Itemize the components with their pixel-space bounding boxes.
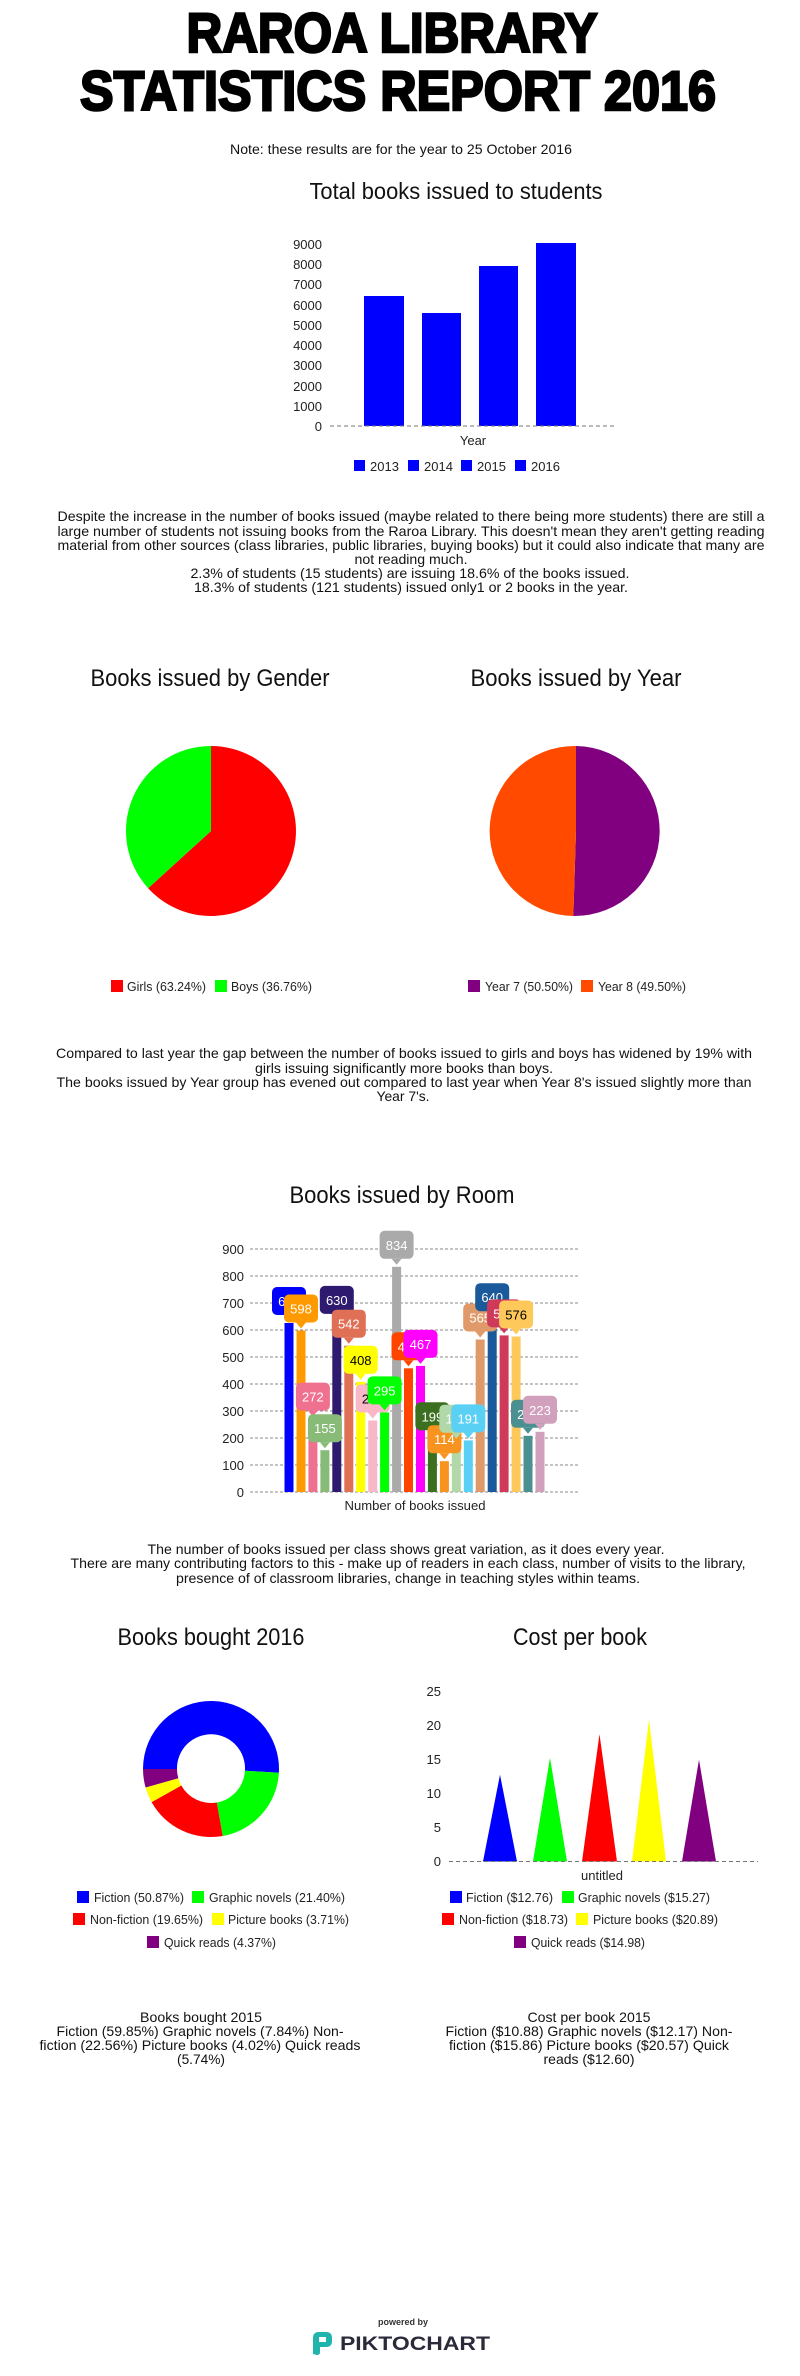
paragraph 1: 18.3% of students (121 students) issued only1 or 2 books in the year. (194, 579, 628, 595)
footer: powered by piktochart: PIKTOCHART (340, 2334, 490, 2355)
bar chart: books issued by room: 626 (278, 1294, 300, 1309)
pie chart: gender: Girls (63.24%) (127, 979, 206, 994)
bar chart: books issued by room: 800 (222, 1269, 244, 1284)
donut chart: books bought 2016: Quick reads (4.37%) (164, 1935, 276, 1950)
triangle chart: cost per book: 10 (427, 1786, 441, 1801)
bar chart: total books issued (293, 178, 616, 474)
bar chart: total books issued: 3000 (293, 358, 322, 373)
text: books bought 2015: (5.74%) (177, 2051, 225, 2067)
bar chart: books issued by room: 542 (338, 1317, 360, 1332)
triangle chart: cost per book: 25 (427, 1684, 441, 1699)
bar chart: books issued by room: 834 (386, 1238, 407, 1253)
bar chart: books issued by room: Number of books issued (344, 1498, 486, 1513)
bar chart: total books issued: 0 (315, 419, 322, 434)
paragraph 2: Year 7's. (376, 1088, 430, 1104)
bar chart: books issued by room: 208 (517, 1407, 539, 1422)
triangle chart: cost per book: 15 (427, 1752, 441, 1767)
text: cost per book 2015 (446, 2009, 733, 2067)
bar chart: books issued by room: 630 (326, 1293, 348, 1308)
triangle chart: cost per book: Quick reads ($14.98) (531, 1935, 645, 1950)
donut chart: books bought 2016: Picture books (3.71%) (228, 1912, 349, 1927)
donut chart: books bought 2016: Fiction (50.87%) (94, 1890, 184, 1905)
bar chart: books issued by room: 295 (374, 1383, 395, 1398)
bar chart: books issued by room: 640 (481, 1290, 503, 1305)
bar chart: books issued by room: 191 (457, 1411, 479, 1426)
footer: powered by piktochart (313, 2317, 490, 2355)
bar chart: total books issued: Year (460, 433, 487, 448)
bar chart: total books issued: 2015 (477, 459, 506, 474)
bar chart: books issued by room: 500 (222, 1350, 244, 1365)
bar chart: total books issued: 8000 (293, 257, 322, 272)
text: cost per book 2015: fiction ($15.86) Picture books ($20.57) Quick (449, 2037, 730, 2053)
pie chart: gender: Books issued by Gender (90, 665, 330, 692)
triangle chart: cost per book: untitled (581, 1868, 623, 1883)
bar chart: books issued by room: 265 (362, 1392, 384, 1406)
bar chart: books issued by room: 155 (314, 1421, 336, 1436)
icon: piktochart logo (313, 2332, 332, 2355)
triangle chart: cost per book: Graphic novels ($15.27) (578, 1890, 710, 1905)
paragraph 3 (70, 1541, 746, 1586)
bar chart: books issued by room: 458 (398, 1339, 419, 1354)
donut chart: books bought 2016: Non-fiction (19.65%) (90, 1912, 203, 1927)
bar chart: books issued by room: 223 (529, 1403, 551, 1418)
bar chart: total books issued: 6000 (293, 298, 322, 313)
bar chart: total books issued: 2013 (370, 459, 399, 474)
note: Note: these results are for the year to 25 October 2016 (230, 141, 572, 157)
paragraph 3: There are many contributing factors to this - make up of readers in each class, number of visits to the library, (70, 1555, 746, 1571)
bar chart: total books issued: 9000 (293, 237, 322, 252)
donut chart: books bought 2016: Graphic novels (21.40%) (209, 1890, 345, 1905)
pie chart: year (468, 665, 686, 994)
text: cost per book 2015: Cost per book 2015 (528, 2009, 651, 2025)
bar chart: books issued by room: 300 (222, 1404, 244, 1419)
bar chart: total books issued: 2014 (424, 459, 453, 474)
paragraph 1: Despite the increase in the number of books issued (maybe related to there being more students) there are still a (58, 508, 765, 524)
paragraph 1: large number of students not issuing books from the Raroa Library. This doesn't mean they aren't getting reading (58, 523, 764, 539)
pie chart: year: Year 7 (50.50%) (485, 979, 573, 994)
title (80, 1, 716, 122)
bar chart: books issued by room: 100 (222, 1458, 244, 1473)
paragraph 1: material from other sources (class libraries, public libraries, buying books) but it could also indicate that many are (58, 537, 765, 553)
pie chart: year: Books issued by Year (470, 665, 682, 692)
paragraph 1: 2.3% of students (15 students) are issuing 18.6% of the books issued. (190, 565, 630, 581)
triangle chart: cost per book: Cost per book (513, 1624, 648, 1651)
bar chart: books issued by room: 408 (350, 1353, 372, 1368)
bar chart: total books issued: 1000 (293, 399, 322, 414)
bar chart: books issued by room: 114 (434, 1432, 455, 1447)
bar chart: books issued by room: 190 (445, 1412, 467, 1427)
triangle chart: cost per book (427, 1624, 758, 1950)
bar chart: books issued by room: 272 (302, 1390, 324, 1405)
title: RAROA LIBRARY (186, 1, 598, 64)
bar chart: total books issued: 2000 (293, 379, 322, 394)
bar chart: total books issued: 7000 (293, 277, 322, 292)
donut chart: books bought 2016: Books bought 2016 (118, 1624, 304, 1651)
paragraph 1: not reading much. (354, 551, 468, 567)
bar chart: books issued by room: 565 (469, 1310, 491, 1326)
triangle chart: cost per book: 5 (434, 1820, 441, 1835)
pie chart: gender (90, 665, 330, 994)
bar chart: books issued by room: 400 (222, 1377, 244, 1392)
triangle chart: cost per book: 0 (434, 1854, 441, 1869)
triangle chart: cost per book: 20 (427, 1718, 441, 1733)
text: books bought 2015: Fiction (59.85%) Graphic novels (7.84%) Non- (56, 2023, 344, 2039)
pie chart: gender: Boys (36.76%) (231, 979, 312, 994)
triangle chart: cost per book: Fiction ($12.76) (466, 1890, 553, 1905)
text: cost per book 2015: reads ($12.60) (544, 2051, 634, 2067)
text: cost per book 2015: Fiction ($10.88) Graphic novels ($12.17) Non- (446, 2023, 733, 2039)
bar chart: books issued by room: 600 (222, 1323, 244, 1338)
paragraph 2 (56, 1045, 752, 1104)
footer: powered by piktochart: powered by (378, 2317, 428, 2327)
triangle chart: cost per book: Picture books ($20.89) (593, 1912, 718, 1927)
text: books bought 2015 (40, 2009, 360, 2067)
triangle chart: cost per book: Non-fiction ($18.73) (459, 1912, 568, 1927)
pie chart: year: Year 8 (49.50%) (598, 979, 686, 994)
bar chart: total books issued: Total books issued to students (310, 178, 602, 204)
bar chart: total books issued: 2016 (531, 459, 560, 474)
title: STATISTICS REPORT 2016 (80, 59, 716, 122)
text: books bought 2015: fiction (22.56%) Picture books (4.02%) Quick reads (40, 2037, 360, 2053)
bar chart: books issued by room (222, 1182, 580, 1513)
paragraph 2: The books issued by Year group has evened out compared to last year when Year 8's issued slightly more than (56, 1074, 752, 1090)
paragraph 3: presence of of classroom libraries, change in teaching styles within teams. (176, 1570, 640, 1586)
bar chart: books issued by room: 580 (493, 1306, 515, 1321)
bar chart: books issued by room: 199 (422, 1409, 443, 1424)
bar chart: books issued by room: 0 (237, 1485, 244, 1500)
bar chart: books issued by room: 467 (410, 1337, 431, 1352)
bar chart: books issued by room: 576 (505, 1308, 527, 1322)
donut chart: books bought 2016 (73, 1624, 349, 1950)
paragraph 2: Compared to last year the gap between the number of books issued to girls and boys has widened by 19% with (56, 1045, 752, 1061)
bar chart: total books issued: 4000 (293, 338, 322, 353)
bar chart: books issued by room: Books issued by Room (290, 1182, 514, 1209)
bar chart: books issued by room: 900 (222, 1242, 244, 1257)
text: books bought 2015: Books bought 2015 (140, 2009, 262, 2025)
bar chart: total books issued: 5000 (293, 318, 322, 333)
bar chart: books issued by room: 598 (290, 1302, 312, 1316)
paragraph 3: The number of books issued per class shows great variation, as it does every year. (148, 1541, 664, 1557)
paragraph 1 (58, 508, 765, 595)
paragraph 2: girls issuing significantly more books than boys. (255, 1060, 553, 1076)
bar chart: books issued by room: 700 (222, 1296, 244, 1311)
bar chart: books issued by room: 200 (222, 1431, 244, 1446)
